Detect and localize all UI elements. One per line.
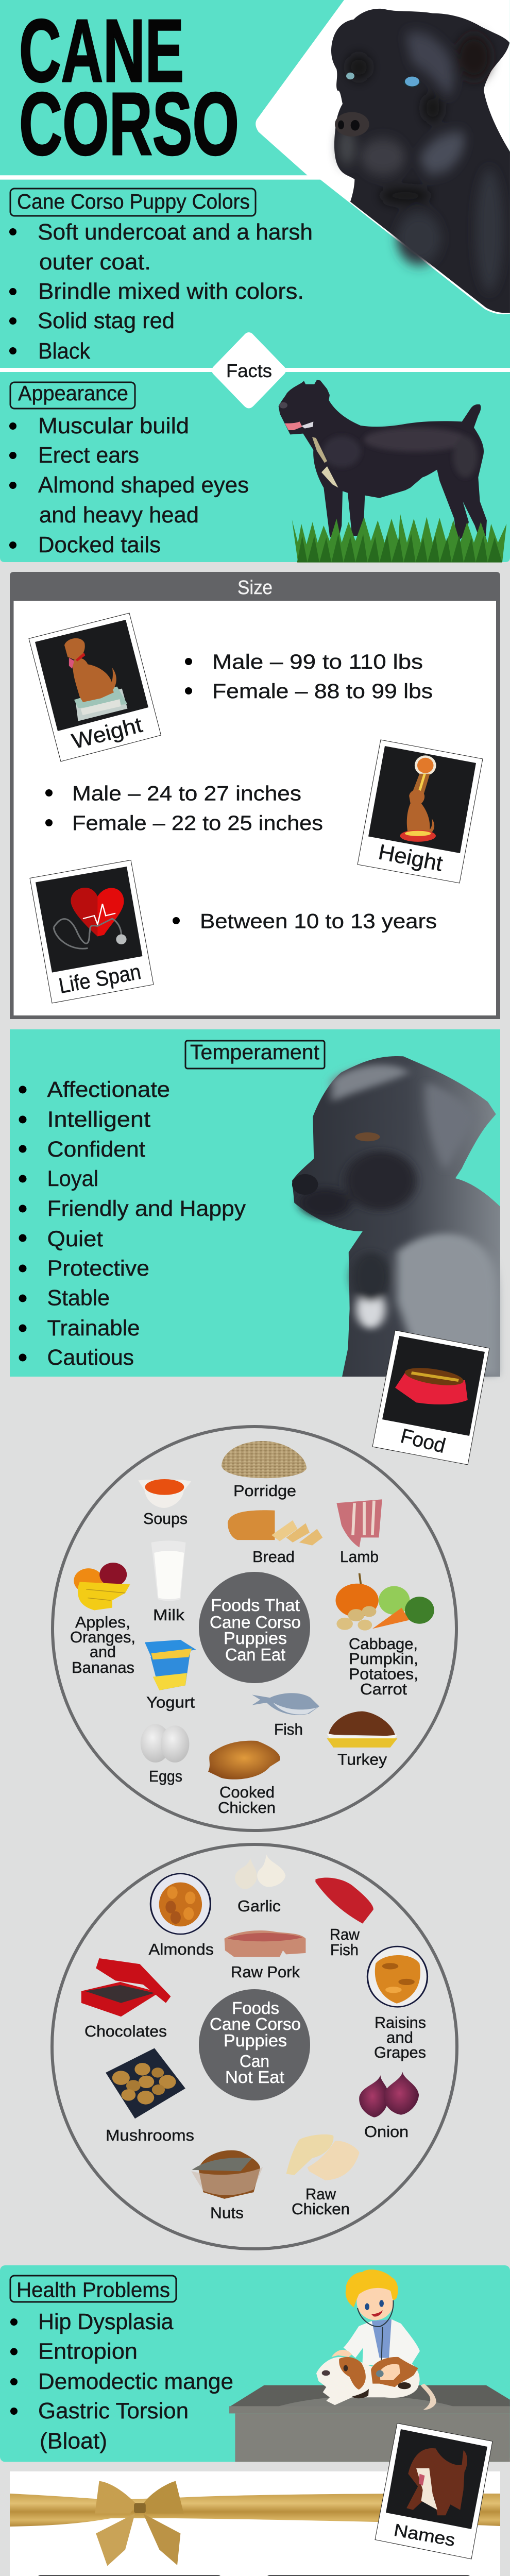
panel: temperament (10, 1029, 500, 1377)
food: apples oranges bananas: Bananas (72, 1658, 134, 1676)
food: lamb: Lamb (340, 1548, 379, 1566)
list: puppy colors: Soft undercoat and a harsh (38, 219, 313, 245)
centre label: Puppies (224, 1629, 287, 1648)
food: yogurt (145, 1640, 196, 1711)
food: eggs: Eggs (149, 1767, 182, 1785)
list: appearance: Almond shaped eyes (38, 472, 249, 498)
white diamond behind dog (0, 0, 510, 314)
food: apples oranges bananas: and (90, 1642, 116, 1661)
list: puppy colors: Solid stag red (38, 308, 175, 333)
food: raisins and grapes: and (386, 2028, 413, 2046)
icon: beagle puppy (406, 2448, 467, 2515)
list: temperament traits: Confident (47, 1137, 145, 1162)
list: temperament traits: Intelligent (47, 1107, 150, 1132)
list: puppy colors: outer coat. (39, 249, 151, 275)
list: temperament traits: Cautious (47, 1345, 134, 1370)
list: temperament traits: Protective (47, 1256, 149, 1281)
food: eggs (141, 1724, 189, 1785)
food: milk (151, 1540, 185, 1624)
list: appearance: Muscular build (38, 413, 189, 438)
food: mushrooms: Mushrooms (106, 2126, 194, 2144)
food: mushrooms (106, 2048, 194, 2144)
chart: foods puppies can not eat (52, 1844, 457, 2249)
food: raw fish: Fish (330, 1941, 359, 1959)
food: raw chicken: Chicken (292, 2200, 350, 2218)
centre label: Foods (232, 1998, 279, 2018)
subtitle: puppy colors: Cane Corso Puppy Colors (17, 190, 250, 213)
outer ring (52, 1844, 457, 2249)
centre label (199, 1572, 310, 1683)
polaroid: weight (29, 613, 161, 761)
food: apples oranges bananas: Oranges, (70, 1628, 135, 1646)
divider: facts line (0, 368, 510, 372)
illustration: vet examining dog (316, 2269, 436, 2410)
food: cabbage pumpkin potatoes carrot (336, 1573, 434, 1698)
food: onion: Onion (364, 2123, 409, 2141)
title (19, 1, 239, 174)
food: raw chicken: Raw (305, 2185, 336, 2203)
food: almonds: Almonds (148, 1940, 214, 1958)
subtitle: appearance: Appearance (18, 381, 128, 405)
food: apples oranges bananas: Apples, (75, 1613, 130, 1631)
panel: header and facts (0, 0, 510, 563)
food: chocolates (81, 1958, 171, 2040)
food: turkey (327, 1711, 397, 1768)
food: raw pork (225, 1930, 305, 1981)
food: chocolates: Chocolates (84, 2022, 167, 2040)
centre label: Cane Corso (210, 2014, 301, 2033)
text: weight values: Female – 88 to 99 lbs (212, 680, 433, 703)
panel: names (10, 2424, 500, 2576)
text: height values: Male – 24 to 27 inches (72, 782, 301, 805)
food: milk: Milk (153, 1606, 185, 1624)
food: cooked chicken: Chicken (218, 1799, 276, 1817)
centre label: Puppies (224, 2031, 287, 2050)
illustration: exam table (229, 2385, 510, 2462)
heading: health problems: Health Problems (16, 2278, 170, 2302)
polaroid: height (358, 740, 483, 883)
list: appearance (9, 413, 249, 557)
food: turkey: Turkey (337, 1751, 387, 1768)
food: porridge (222, 1441, 307, 1500)
badge: facts: Facts (226, 360, 272, 381)
food: nuts: Nuts (210, 2204, 244, 2222)
list: appearance: Erect ears (38, 443, 139, 468)
food: cabbage pumpkin potatoes carrot: Pumpkin, (349, 1650, 418, 1668)
panel: health problems (0, 2265, 510, 2462)
teal background (0, 2265, 510, 2462)
teal background (10, 1029, 500, 1377)
list: health problems (10, 2309, 233, 2453)
food: fish: Fish (274, 1720, 303, 1738)
centre label: Not Eat (225, 2067, 284, 2087)
food: garlic (235, 1854, 285, 1915)
food: bread: Bread (252, 1548, 295, 1566)
food: raw chicken (286, 2134, 360, 2218)
food: raisins and grapes: Grapes (374, 2043, 426, 2061)
text: height values (45, 782, 323, 835)
white background (10, 2471, 500, 2576)
panel: size (10, 572, 500, 1019)
food: raw fish (315, 1878, 373, 1959)
food: raisins and grapes: Raisins (375, 2013, 426, 2031)
polaroid: names: Names (393, 2520, 456, 2550)
photo: cane corso head (331, 9, 510, 313)
list: temperament traits: Friendly and Happy (47, 1196, 246, 1221)
text: height values: Female – 22 to 25 inches (72, 812, 323, 835)
list: puppy colors: Brindle mixed with colors. (38, 279, 304, 304)
outer ring (53, 1427, 456, 1831)
polaroid: life span (30, 860, 154, 1003)
icon: food bowl (395, 1365, 468, 1404)
centre label: Cane Corso (210, 1613, 301, 1632)
centre label: Can (240, 2052, 269, 2071)
list: health problems: Hip Dysplasia (38, 2309, 174, 2334)
polaroid: food: Food (398, 1425, 448, 1458)
food: apples oranges bananas (70, 1563, 135, 1676)
list: puppy colors (9, 219, 313, 364)
food: cooked chicken: Cooked (219, 1783, 275, 1801)
food: raisins and grapes (367, 1946, 428, 2061)
food: cabbage pumpkin potatoes carrot: Carrot (360, 1680, 407, 1698)
food: cabbage pumpkin potatoes carrot: Potatoes, (349, 1665, 418, 1683)
food: cooked chicken (208, 1741, 280, 1817)
list: temperament traits: Trainable (47, 1316, 140, 1341)
food: yogurt: Yogurt (146, 1693, 195, 1711)
list: temperament traits: Stable (47, 1286, 110, 1311)
centre label: Can Eat (225, 1645, 285, 1664)
food: nuts (191, 2150, 263, 2222)
food: porridge: Porridge (233, 1482, 296, 1500)
polaroid: height: Height (377, 839, 445, 876)
heading: size: Size (237, 577, 273, 599)
polaroid: food (372, 1330, 489, 1465)
decoration: gold ribbon and bow (10, 2481, 500, 2566)
food: raw fish: Raw (330, 1925, 360, 1943)
title: CORSO (19, 74, 239, 174)
list: health problems: Entropion (38, 2339, 138, 2364)
text: weight values: Male – 99 to 110 lbs (212, 651, 423, 673)
food: cabbage pumpkin potatoes carrot: Cabbage, (349, 1635, 418, 1653)
food: lamb (336, 1499, 382, 1566)
heading: temperament: Temperament (190, 1040, 320, 1064)
centre label (199, 1989, 310, 2100)
food: raw pork: Raw Pork (231, 1963, 300, 1981)
badge: facts (212, 332, 286, 408)
list: health problems: (Bloat) (40, 2429, 107, 2453)
chart: foods puppies can eat (53, 1427, 456, 1831)
list: appearance: and heavy head (39, 502, 199, 528)
polaroid: life span: Life Span (57, 959, 143, 998)
food: almonds (148, 1874, 214, 1958)
text: weight values (185, 651, 433, 703)
panel body (13, 601, 496, 1015)
food: bread (228, 1510, 322, 1566)
list: temperament traits: Quiet (47, 1227, 103, 1251)
list: puppy colors: Black (38, 338, 91, 364)
polaroid: weight: Weight (69, 713, 145, 753)
list: appearance: Docked tails (38, 532, 161, 557)
photo: grey puppy (292, 1056, 500, 1377)
text: life span value: Between 10 to 13 years (200, 910, 437, 933)
panel frame and header bar (10, 572, 500, 1019)
title: CANE (19, 1, 184, 100)
list: health problems: Gastric Torsion (38, 2398, 189, 2424)
food: soups (138, 1479, 191, 1528)
photo: standing dog on grass (279, 380, 506, 563)
list: temperament traits: Loyal (47, 1166, 98, 1191)
list: temperament traits: Affectionate (47, 1077, 170, 1102)
teal background (0, 0, 510, 562)
polaroid: names (375, 2424, 492, 2559)
list: health problems: Demodectic mange (38, 2369, 233, 2394)
list: temperament traits (19, 1077, 246, 1370)
food: garlic: Garlic (237, 1897, 281, 1915)
food: soups: Soups (143, 1510, 188, 1528)
centre label: Foods That (211, 1596, 300, 1615)
food: onion (359, 2072, 419, 2141)
food: fish (252, 1693, 319, 1738)
